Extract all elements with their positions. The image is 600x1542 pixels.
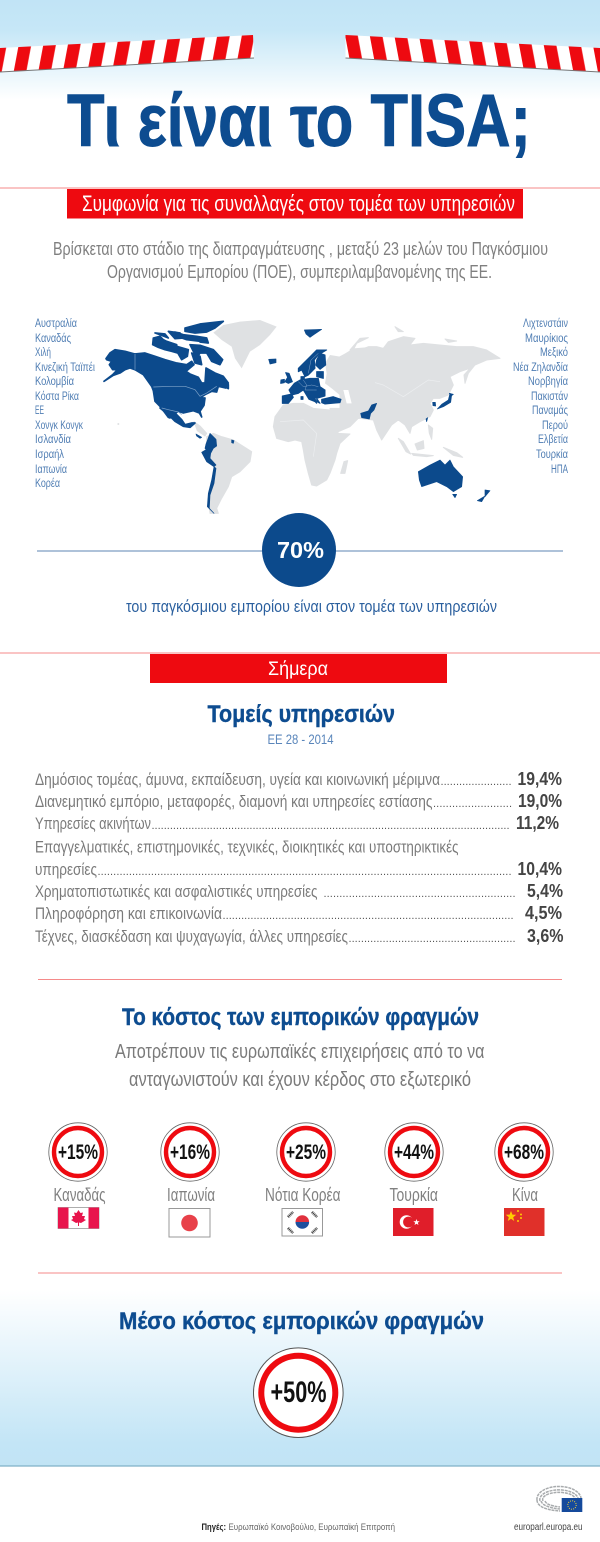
- stat circle: 70%: [262, 513, 336, 587]
- list: sectors: .......................: [440, 776, 512, 788]
- item: Canada: +15%: [58, 1141, 98, 1164]
- list: sectors: Διανεμητικό εμπόριο, μεταφορές, διαμονή και υπηρεσίες εστίασης: [35, 792, 432, 811]
- intro text: Οργανισμού Εμπορίου (ΠΟΕ), συμπεριλαμβανομένης της ΕΕ.: [107, 262, 492, 282]
- stat circle: 70%: 70%: [277, 537, 324, 563]
- banner: today: [150, 654, 447, 683]
- list: members left: Χονγκ Κονγκ: [35, 420, 83, 432]
- list: sectors: 11,2%: [516, 813, 559, 833]
- list: sectors: 19,0%: [518, 791, 562, 811]
- list: sectors: Δημόσιος τομέας, άμυνα, εκπαίδευση, υγεία και κιοινωνική μέριμνα: [35, 770, 440, 789]
- item: Canada: [49, 1123, 107, 1228]
- item: Turkey: Τουρκία: [390, 1185, 438, 1205]
- list: members right: Περού: [542, 420, 568, 432]
- map: Oceania and Arctic highlighted: [269, 329, 490, 502]
- list: members left: Χιλή: [35, 347, 51, 359]
- list: sectors: ..............................................................................................: [222, 910, 514, 922]
- list: members right: ΗΠΑ: [551, 464, 568, 476]
- item: South Korea: +25%: [286, 1141, 326, 1164]
- map: North America highlighted: [104, 321, 228, 427]
- list: sectors: ....................................................................................................................................: [98, 866, 512, 878]
- map: Asia highlighted: [361, 393, 453, 422]
- map: Europe highlighted: [281, 350, 341, 404]
- source note: Πηγές:: [202, 1522, 226, 1533]
- list: members left: Κορέα: [35, 478, 60, 490]
- list: members right: Ελβετία: [538, 434, 568, 446]
- barrier: left: [0, 35, 254, 72]
- list: members right: Νορβηγία: [528, 376, 568, 388]
- list: members left: Καναδάς: [35, 333, 71, 345]
- list: members left: Κολομβία: [35, 376, 74, 388]
- sign: +50%: +50%: [270, 1376, 326, 1409]
- list: sectors: Χρηματοπιστωτικές και ασφαλιστικές υπηρεσίες: [35, 882, 318, 901]
- list: members left: Κινεζική Ταϊπέι: [35, 362, 95, 374]
- item: Japan: Ιαπωνία: [167, 1185, 215, 1205]
- list: members left: Κόστα Ρίκα: [35, 391, 79, 403]
- item: Turkey: +44%: [394, 1141, 434, 1164]
- list: sectors: 3,6%: [527, 926, 564, 946]
- list: members left: Ιαπωνία: [35, 464, 67, 476]
- list: sectors: Επαγγελματικές, επιστημονικές, τεχνικές, διοικητικές και υποστηρικτικές: [35, 838, 458, 856]
- text: barriers description: [115, 1041, 484, 1091]
- source note: Ευρωπαϊκό Κοινοβούλιο, Ευρωπαϊκή Επιτροπή: [228, 1522, 395, 1533]
- list: members right: Μαυρίκιος: [525, 333, 568, 345]
- item: Canada: Καναδάς: [54, 1185, 106, 1205]
- list: members right: Μεξικό: [540, 347, 568, 359]
- list: members left: Αυστραλία: [35, 318, 77, 330]
- list: sectors: 19,4%: [518, 769, 562, 789]
- item: China: +68%: [504, 1141, 544, 1164]
- list: members left: [35, 318, 95, 490]
- list: sectors: 5,4%: [527, 881, 563, 901]
- item: South Korea: Νότια Κορέα: [265, 1185, 340, 1205]
- barrier: right: [346, 35, 600, 72]
- list: sectors: Υπηρεσίες ακινήτων: [35, 814, 151, 833]
- text: barriers description: ανταγωνιστούν και έχουν κέρδος στο εξωτερικό: [129, 1069, 471, 1091]
- heading: service sectors: Τομείς υπηρεσιών: [208, 701, 395, 728]
- item: Japan: +16%: [170, 1141, 210, 1164]
- sign: +50%: [253, 1348, 343, 1437]
- item: South Korea: [265, 1123, 340, 1236]
- heading: cost of trade barriers: Το κόστος των εμπορικών φραγμών: [122, 1004, 479, 1031]
- list: members left: Ισλανδία: [35, 434, 71, 446]
- list: members right: [513, 318, 568, 476]
- world map: [104, 320, 500, 513]
- website: europarl.europa.eu: [514, 1522, 582, 1533]
- intro text: [53, 239, 548, 282]
- list: members left: ΕΕ: [35, 405, 44, 417]
- list: members left: Ισραήλ: [35, 449, 64, 461]
- list: sectors: υπηρεσίες: [35, 860, 97, 879]
- list: sectors: 4,5%: [525, 903, 562, 923]
- logo: European Parliament: [537, 1486, 582, 1512]
- item: China: Κίνα: [512, 1185, 538, 1205]
- list: sectors: .....................................................................................................................: [152, 820, 510, 832]
- list: sectors: Πληροφόρηση και επικοινωνία: [35, 904, 222, 923]
- list: members right: Πακιστάν: [531, 391, 568, 403]
- list: members right: Τουρκία: [536, 449, 568, 461]
- banner: today: Σήμερα: [268, 659, 328, 680]
- subheading: EU 28: ΕΕ 28 - 2014: [268, 731, 334, 747]
- list: sectors: Τέχνες, διασκέδαση και ψυχαγωγία, άλλες υπηρεσίες: [35, 927, 348, 946]
- list: sectors: 10,4%: [518, 859, 562, 879]
- list: sectors: ......................................................: [348, 933, 516, 945]
- item: Turkey: [385, 1123, 443, 1236]
- list: sectors: [35, 769, 564, 946]
- list: members right: Παναμάς: [532, 405, 568, 417]
- map: South America highlighted: [196, 433, 234, 513]
- item: China: [495, 1123, 553, 1236]
- list: members right: Νέα Ζηλανδία: [513, 362, 568, 374]
- list: members right: Λιχτενστάιν: [523, 318, 568, 330]
- list: sectors: .........................: [433, 798, 512, 810]
- list: sectors: .............................................................: [324, 888, 516, 900]
- text: barriers description: Αποτρέπουν τις ευρωπαϊκές επιχειρήσεις από το να: [115, 1041, 484, 1063]
- stat caption: του παγκόσμιου εμπορίου είναι στον τομέα των υπηρεσιών: [126, 597, 497, 616]
- item: Japan: [161, 1123, 219, 1237]
- heading: average cost: Μέσο κόστος εμπορικών φραγμών: [119, 1308, 484, 1335]
